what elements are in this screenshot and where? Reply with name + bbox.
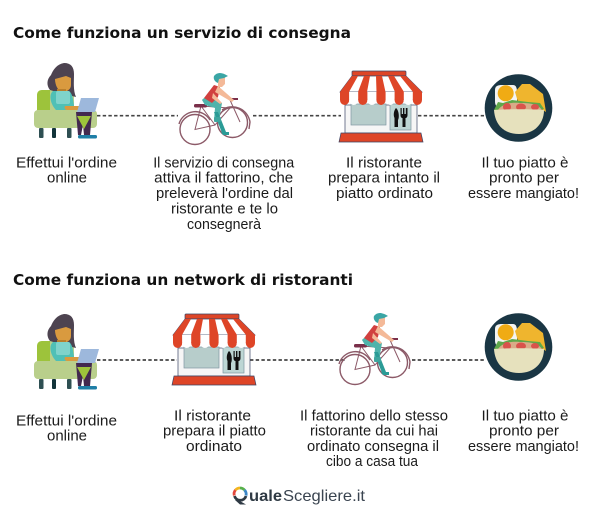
step text: ristorante prepara (163, 409, 266, 455)
step text: ristorante prepara: ordinato (186, 439, 242, 455)
step text: ristorante prepara: Il ristorante (346, 155, 422, 171)
dotted connector line (97, 115, 484, 117)
icon: plate of food (485, 74, 552, 142)
step text: fattorino consegna: ristorante da cui hai (310, 424, 438, 440)
step text: servizio attiva il fattorino: Il servizio di consegna (153, 155, 295, 171)
icon: restaurant storefront (172, 314, 256, 385)
step text: fattorino consegna: Il fattorino dello stesso (300, 409, 448, 425)
step text: fattorino consegna: ordinato consegna il (307, 439, 439, 455)
heading: servizio di consegna: Come funziona un servizio di consegna (13, 24, 351, 42)
wordmark: uale (249, 488, 282, 505)
step text: ristorante prepara (328, 155, 440, 202)
step text: piatto pronto: essere mangiato! (468, 186, 579, 202)
wordmark (249, 488, 366, 505)
step text: ordine online: Effettui l'ordine (16, 414, 117, 430)
step text: servizio attiva il fattorino (153, 155, 295, 233)
icon: restaurant storefront (339, 71, 423, 142)
step text: servizio attiva il fattorino: consegnerà (187, 217, 262, 233)
step text: ristorante prepara: Il ristorante (174, 409, 251, 425)
step text: ordine online (16, 414, 117, 445)
step text: piatto pronto: Il tuo piatto è (482, 409, 568, 425)
step text: servizio attiva il fattorino: attiva il fattorino, che (154, 171, 293, 187)
step text: piatto pronto: pronto per (489, 171, 559, 187)
icon: plate of food (485, 313, 552, 381)
flow: network di ristoranti (16, 313, 579, 470)
step text: fattorino consegna: cibo a casa tua (326, 454, 419, 470)
heading: network di ristoranti: Come funziona un network di ristoranti (13, 271, 353, 289)
icon: logo Q mark (234, 488, 246, 504)
step text: ristorante prepara: piatto ordinato (336, 186, 433, 202)
icon: person ordering on laptop (34, 63, 99, 138)
dotted connector line (97, 359, 485, 361)
logo: QualeScegliere.it (234, 488, 366, 505)
step text: piatto pronto (468, 409, 579, 455)
step text: servizio attiva il fattorino: preleverà l'ordine dal (156, 186, 293, 202)
icon: delivery rider on bicycle (179, 73, 250, 144)
step text: ordine online: Effettui l'ordine (16, 155, 117, 171)
step text: servizio attiva il fattorino: ristorante e te lo (171, 201, 278, 217)
step text: piatto pronto: essere mangiato! (468, 439, 579, 455)
step text: ordine online (16, 155, 117, 187)
flow: servizio di consegna (16, 63, 579, 233)
icon: person ordering on laptop (34, 314, 99, 390)
step text: ristorante prepara: prepara intanto il (328, 171, 440, 187)
step text: ordine online: online (47, 429, 87, 445)
wordmark: Scegliere.it (283, 488, 366, 505)
step text: piatto pronto (468, 155, 579, 202)
step text: ordine online: online (47, 171, 87, 187)
step text: piatto pronto: Il tuo piatto è (482, 155, 568, 171)
step text: ristorante prepara: prepara il piatto (163, 424, 266, 440)
step text: fattorino consegna (300, 409, 448, 470)
step text: piatto pronto: pronto per (489, 424, 559, 440)
icon: delivery rider on bicycle (339, 313, 410, 384)
